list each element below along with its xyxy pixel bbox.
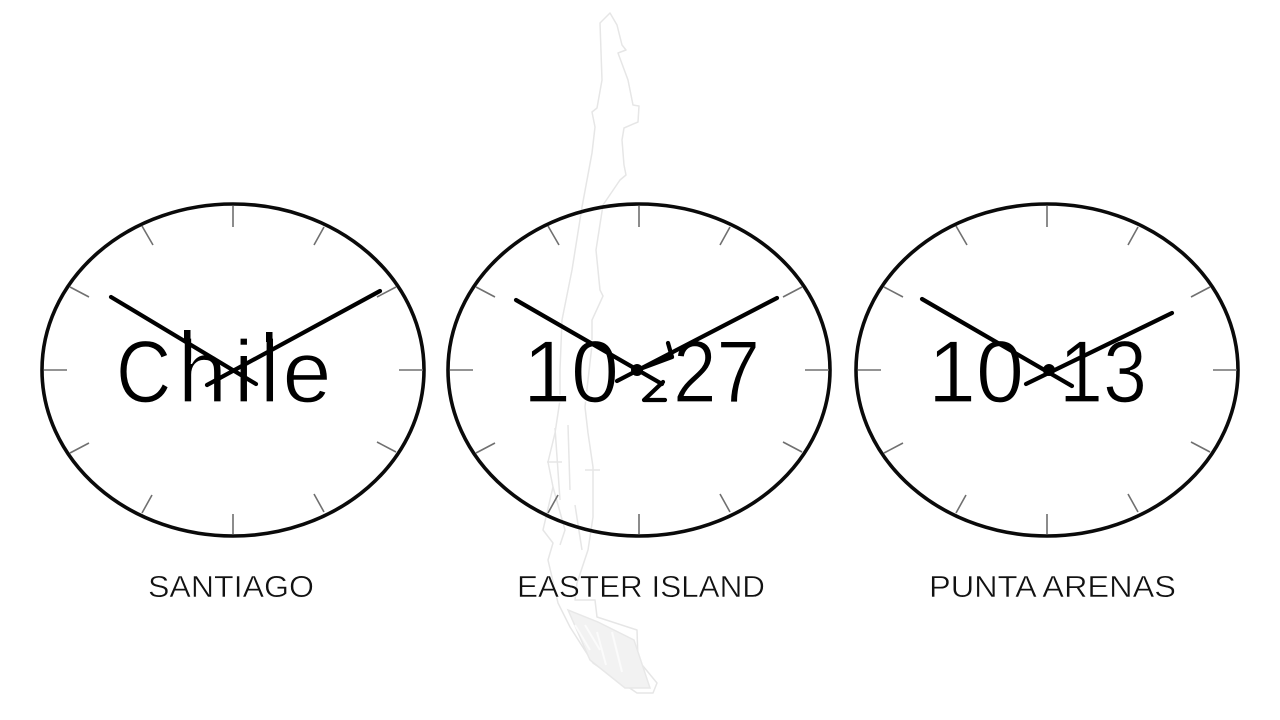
hour ticks [450,206,829,534]
time text: Chile: C [116,323,171,421]
clock: Easter Island [448,204,830,536]
time text: 10 13 [928,322,1147,421]
time text: Chile: h [178,322,227,421]
clock: Punta Arenas [856,204,1238,536]
clock face [448,204,830,536]
label: Punta Arenas: PUNTA ARENAS [929,569,1176,604]
clock hands [111,291,380,385]
hour ticks [44,206,423,534]
label: Easter Island: EASTER ISLAND [517,569,765,604]
clock hands [922,299,1172,386]
clock: Santiago [42,204,424,536]
time text: 10:27: 27 [673,322,760,421]
hour ticks [858,206,1237,534]
time text: 10 13: 13 [1059,322,1147,421]
time text: Chile: l [260,322,280,421]
map: faint outline of Chile [543,13,657,693]
time text: 10:27 [523,322,760,421]
clock hands [516,298,777,384]
label: Santiago: SANTIAGO [148,569,314,604]
time text: Chile: e [282,322,331,421]
clock face [42,204,424,536]
time text: Chile: i [234,322,254,421]
time text: 10 13: 10 [928,322,1024,421]
time text: Chile [116,322,331,421]
clock face [856,204,1238,536]
time text: 10:27: 10 [523,322,619,421]
